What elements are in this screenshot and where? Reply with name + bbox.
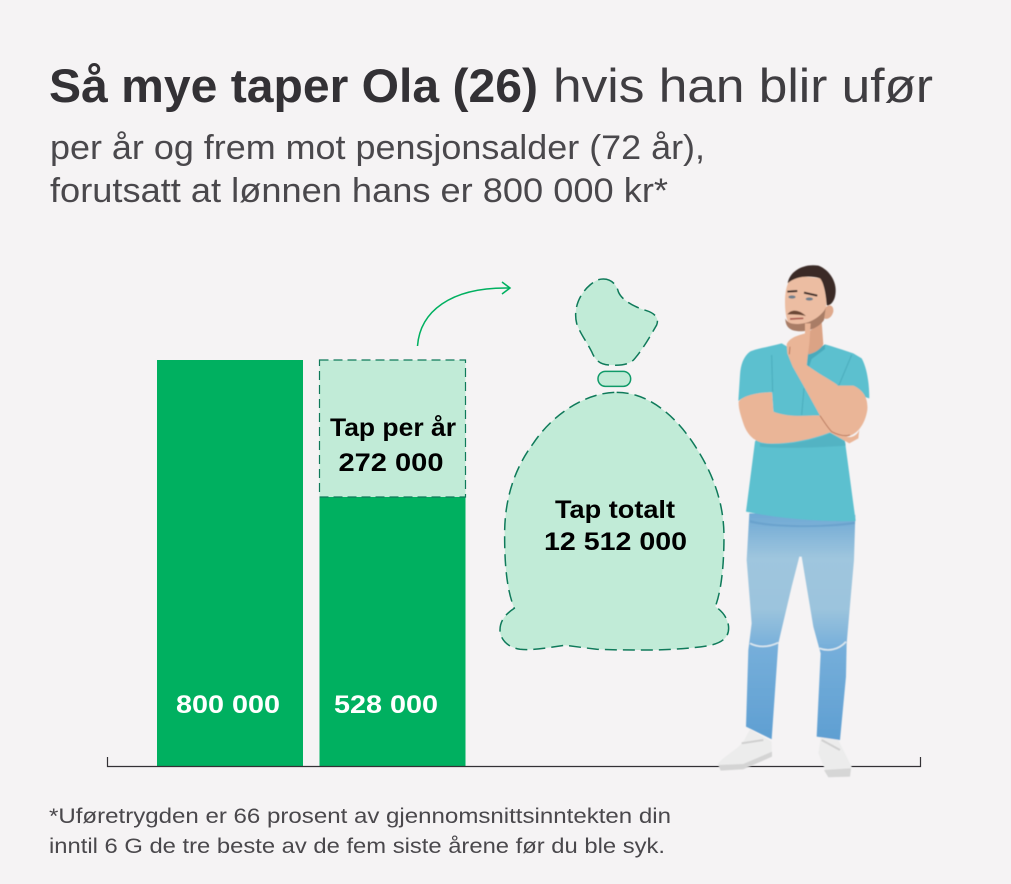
money bag: total loss: Tap totalt bbox=[555, 496, 676, 524]
money bag: total loss bbox=[500, 279, 729, 650]
footnote: *Uføretrygden er 66 prosent av gjennomsnittsinntekten din bbox=[49, 805, 671, 828]
footnote bbox=[49, 805, 671, 858]
bar segment: yearly loss 272 000: Tap per år bbox=[330, 414, 456, 442]
baseline axis bbox=[108, 757, 920, 766]
subtitle: forutsatt at lønnen hans er 800 000 kr* bbox=[50, 172, 668, 210]
title bbox=[49, 59, 933, 112]
bar: income today 800 000: 800 000 bbox=[176, 691, 280, 719]
title: Så mye taper Ola (26) bbox=[49, 59, 538, 112]
bar: income today 800 000 bbox=[157, 360, 303, 766]
subtitle: per år og frem mot pensjonsalder (72 år), bbox=[50, 129, 705, 167]
person: thinking man bbox=[718, 265, 869, 777]
bar: income when disabled 528 000: 528 000 bbox=[334, 691, 438, 719]
title: hvis han blir ufør bbox=[553, 59, 933, 112]
money bag: total loss: 12 512 000 bbox=[544, 528, 687, 556]
arrow to money bag bbox=[418, 282, 510, 346]
footnote: inntil 6 G de tre beste av de fem siste årene før du ble syk. bbox=[49, 835, 665, 858]
bar: income when disabled 528 000 bbox=[320, 497, 466, 766]
bar segment: yearly loss 272 000 bbox=[320, 360, 466, 497]
bar segment: yearly loss 272 000: 272 000 bbox=[338, 449, 444, 477]
subtitle bbox=[50, 129, 705, 210]
